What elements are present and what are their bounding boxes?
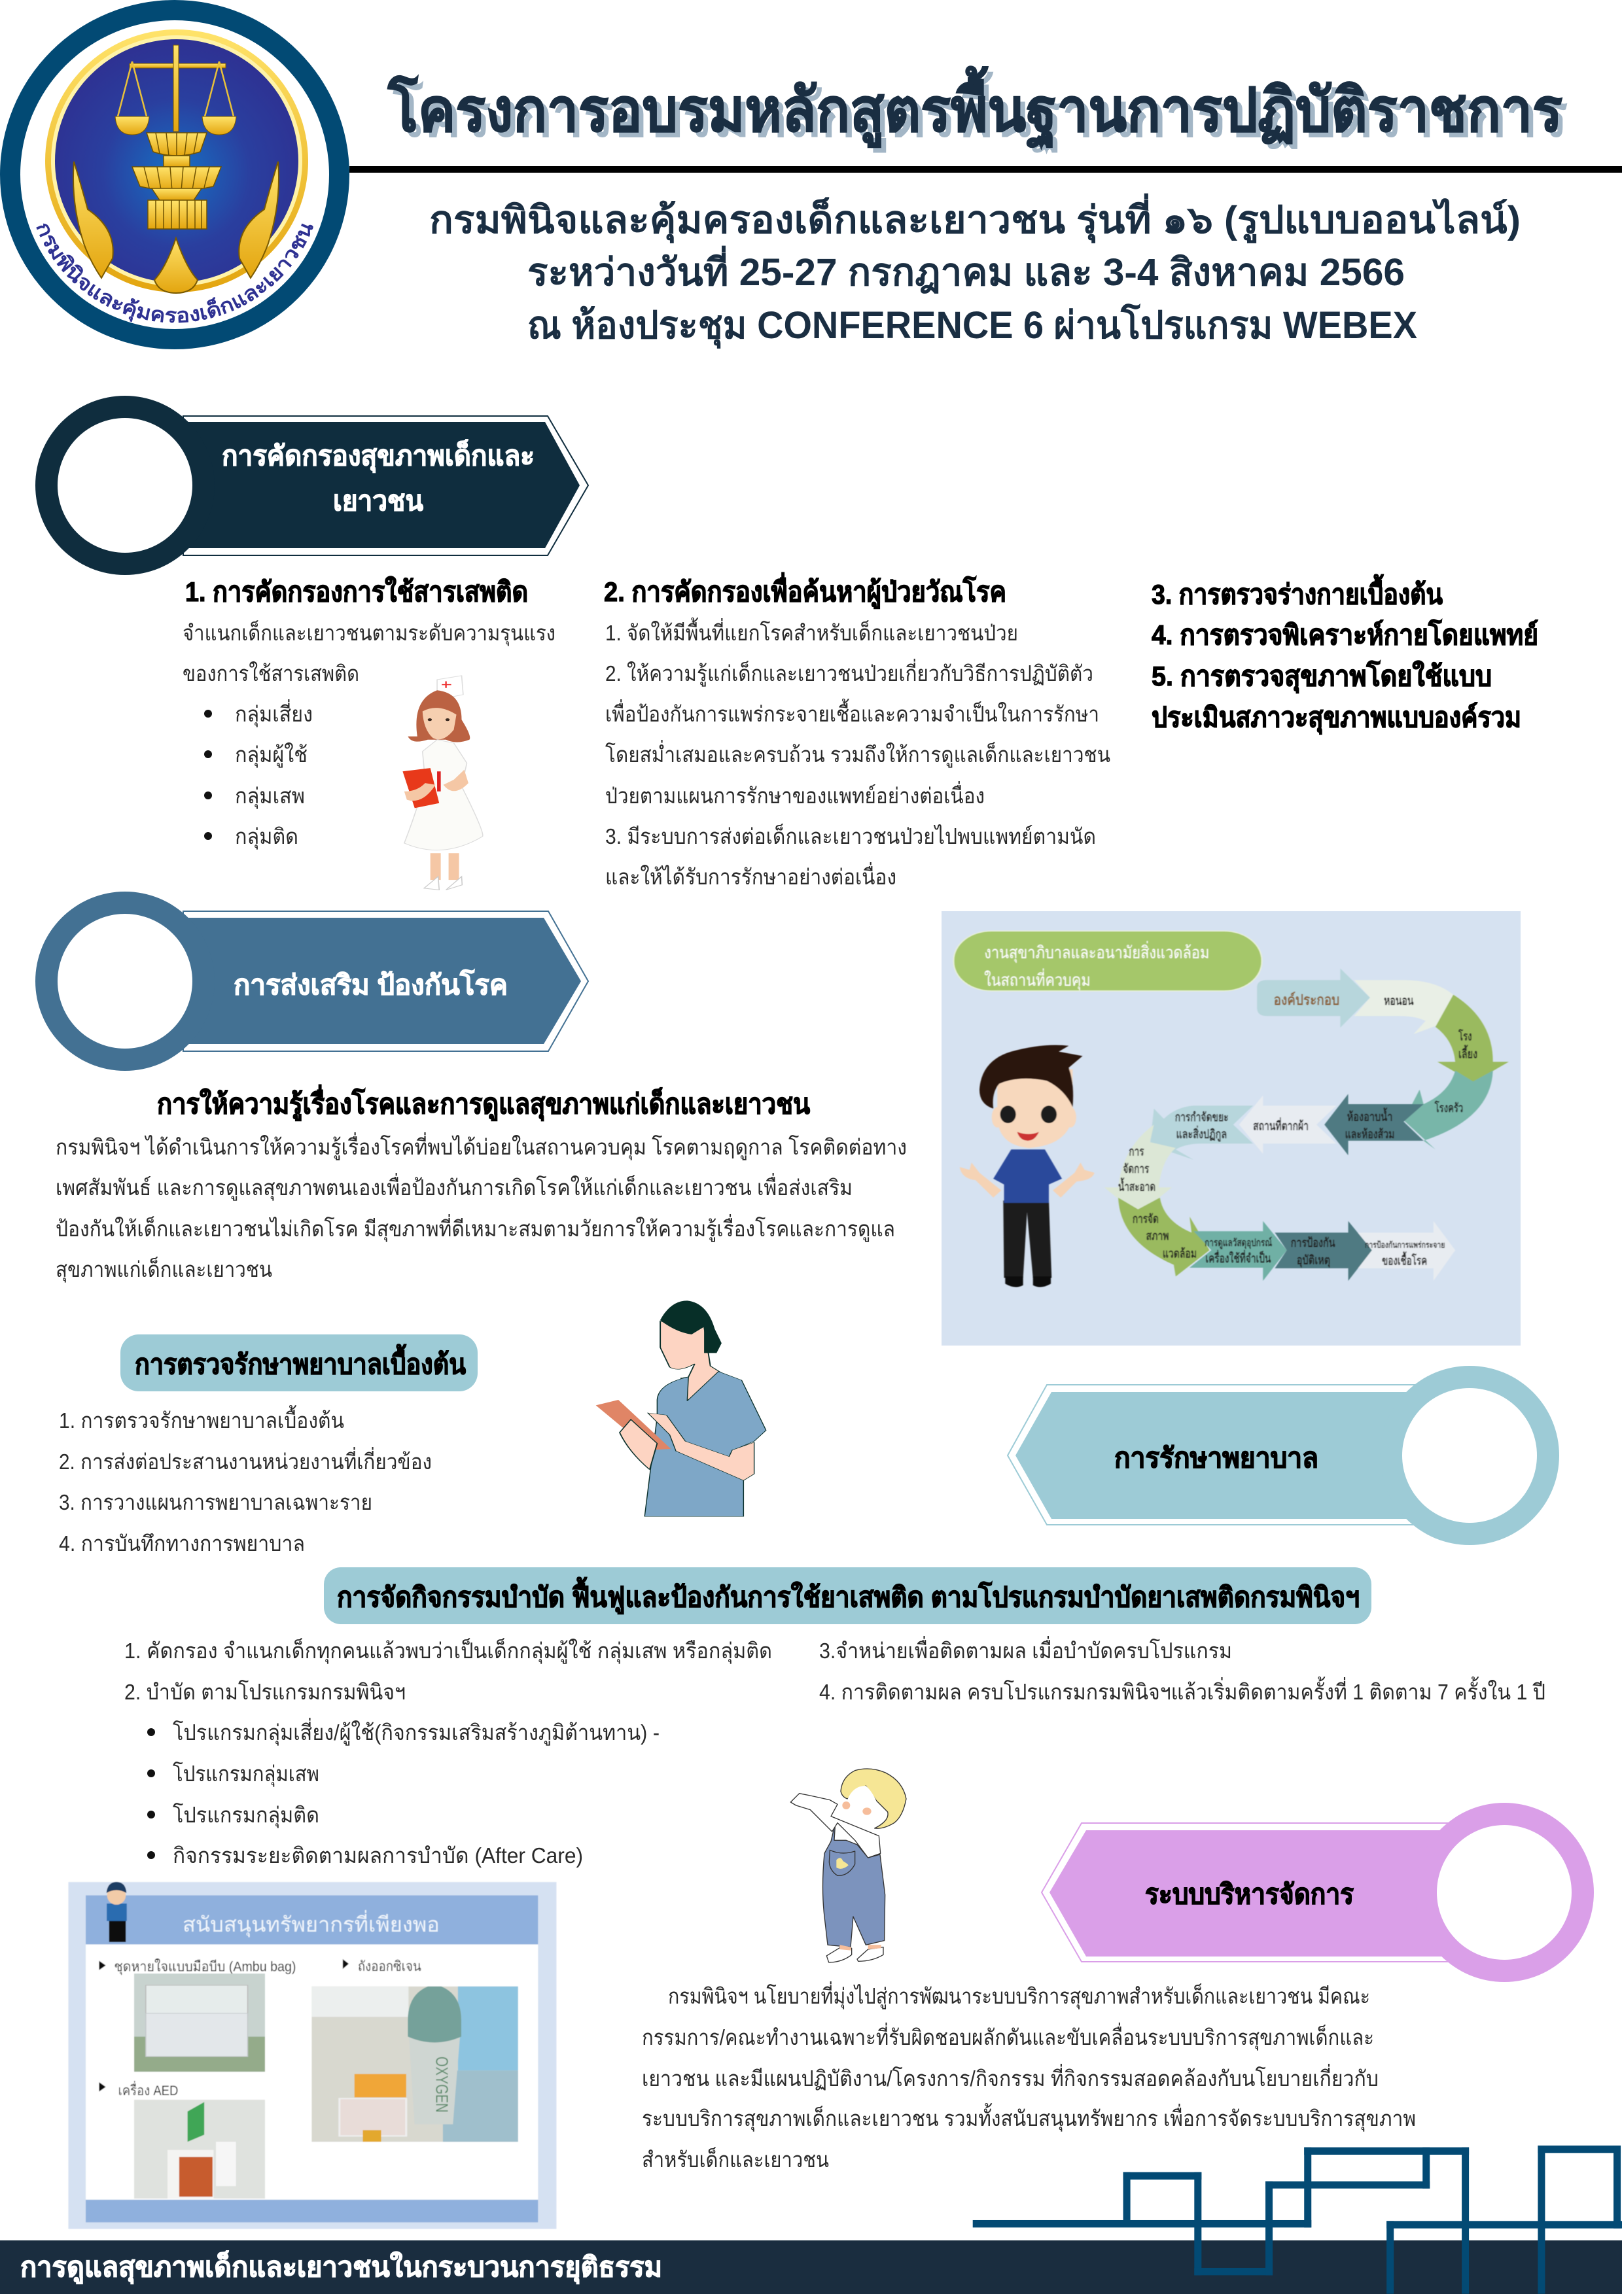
pill heading: primary nursing care — [120, 1334, 478, 1391]
icon: bottom flame — [154, 238, 198, 293]
arrow: components flow: เครื่องใช้ที่จำเป็น — [1205, 1249, 1271, 1265]
text block: examinations list: 3. การตรวจร่างกายเบื้องต้น — [1152, 574, 1443, 610]
arrow: components flow: องค์ประกอบ — [1274, 992, 1339, 1008]
text block: management paragraph: กรมพินิจฯ นโยบายที่มุ่งไปสู่การพัฒนาระบบบริการสุขภาพสำหรับเด็กและเยาวชน มีคณะ — [668, 1981, 1370, 2009]
banner: health promotion and disease prevention — [35, 892, 588, 1071]
text block: disease education paragraph — [56, 1132, 907, 1283]
text block: rehabilitation steps left: 2. บำบัด ตามโปรแกรมกรมพินิจฯ — [124, 1680, 406, 1704]
text block: substance screening: กลุ่มติด — [235, 824, 298, 850]
arrow: components flow: การกำจัดขยะ — [1175, 1110, 1229, 1124]
text block: TB screening: 3. มีระบบการส่งต่อเด็กและเยาวชนป่วยไปพบแพทย์ตามนัด — [605, 824, 1096, 848]
text block: substance screening: 1. การคัดกรองการใช้สารเสพติด — [185, 576, 528, 607]
text block: TB screening: ป่วยตามแผนการรักษาของแพทย์อย่างต่อเนื่อง — [605, 781, 985, 808]
arrow: components flow: โรง — [1458, 1029, 1472, 1043]
text block: primary care list — [59, 1405, 432, 1556]
footer bar with title: การดูแลสุขภาพเด็กและเยาวชนในกระบวนการยุติธรรม — [20, 2250, 662, 2284]
text block: substance screening: กลุ่มเสพ — [235, 784, 305, 809]
text block: substance screening: กลุ่มผู้ใช้ — [235, 742, 308, 768]
text block: examinations list: 4. การตรวจพิเคราะห์กายโดยแพทย์ — [1152, 619, 1538, 650]
text block: substance screening: จำแนกเด็กและเยาวชนตามระดับความรุนแรง — [183, 620, 555, 646]
arrow: components flow: สภาพ — [1146, 1229, 1169, 1243]
text block: disease education paragraph: สุขภาพแก่เด็กและเยาวชน — [56, 1257, 272, 1283]
panel: environmental sanitation diagram — [942, 911, 1521, 1346]
arrow: components flow: ห้องอาบน้ำ — [1347, 1107, 1392, 1124]
text block: rehabilitation steps left — [124, 1638, 772, 1868]
text block: management paragraph: เยาวชน และมีแผนปฏิบัติงาน/โครงการ/กิจกรรม ที่กิจกรรมสอดคล้องกับนโยบายเกี่ยวกับ — [642, 2064, 1379, 2091]
text block: TB screening: และให้ได้รับการรักษาอย่างต่อเนื่อง — [605, 862, 896, 889]
subtitle: course details: ระหว่างวันที่ 25-27 กรกฎาคม และ 3-4 สิงหาคม 2566 — [527, 245, 1405, 294]
text block: TB screening: 2. ให้ความรู้แก่เด็กและเยาวชนป่วยเกี่ยวกับวิธีการปฏิบัติตัว — [605, 659, 1093, 687]
text block: rehabilitation steps right: 3.จำหน่ายเพื่อติดตามผล เมื่อบำบัดครบโปรแกรม — [819, 1636, 1232, 1663]
text block: examinations list: 5. การตรวจสุขภาพโดยใช้แบบ — [1152, 660, 1492, 693]
text block: management paragraph — [642, 1981, 1416, 2172]
text block: primary care list: 1. การตรวจรักษาพยาบาลเบื้องต้น — [59, 1405, 344, 1433]
text block: substance screening: กลุ่มเสี่ยง — [235, 699, 313, 727]
illustration: child in overalls — [790, 1769, 906, 1962]
arrow: components flow: น้ำสะอาด — [1118, 1177, 1155, 1194]
text block: management paragraph: สำหรับเด็กและเยาวชน — [642, 2147, 829, 2172]
illustration: nurse with tablet — [596, 1300, 766, 1516]
arrow: components flow — [1104, 968, 1509, 1281]
text block: rehabilitation steps left: โปรแกรมกลุ่มเสพ — [173, 1762, 319, 1787]
arrow: components flow: เลี้ยง — [1458, 1045, 1477, 1061]
arrow: components flow: และห้องส้วม — [1345, 1127, 1394, 1141]
photo: oxygen tank: ถังออกซิเจน — [358, 1958, 421, 1974]
icon: lotus pedestal — [132, 133, 221, 229]
seal curved caption — [33, 216, 317, 322]
icon: scales of justice — [115, 45, 236, 135]
photo: AED cabinet: เครื่อง AED — [118, 2081, 178, 2098]
text block: TB screening — [604, 572, 1110, 889]
banner: health promotion and disease prevention: การส่งเสริม ป้องกันโรค — [234, 969, 508, 1000]
banner: medical care — [1008, 1366, 1559, 1545]
text block: TB screening: 1. จัดให้มีพื้นที่แยกโรคสำหรับเด็กและเยาวชนป่วย — [605, 617, 1018, 645]
banner: management system: ระบบบริหารจัดการ — [1145, 1879, 1354, 1909]
text block: substance screening — [183, 576, 555, 850]
arrow: components flow: การ — [1129, 1145, 1144, 1158]
text block: primary care list: 3. การวางแผนการพยาบาลเฉพาะราย — [59, 1490, 372, 1514]
footer bar with title — [0, 2240, 1622, 2294]
logo: department seal: กรมพินิจและคุ้มครองเด็กและเยาวชน — [36, 224, 313, 323]
subtitle: course details: ณ ห้องประชุม CONFERENCE 6 ผ่านโปรแกรม WEBEX — [527, 302, 1417, 349]
banner: health screening: การคัดกรองสุขภาพเด็กและ — [222, 439, 535, 473]
text block: disease education paragraph: เพศสัมพันธ์ และการดูแลสุขภาพตนเองเพื่อป้องกันการเกิดโรคให้แก่เด็กและเยาวชน เพื่อส่งเสริม — [56, 1173, 853, 1201]
arrow: components flow: ของเชื้อโรค — [1382, 1251, 1427, 1268]
text block: TB screening: 2. การคัดกรองเพื่อค้นหาผู้ป่วยวัณโรค — [604, 572, 1006, 609]
decorative city-line graphic — [973, 2146, 1622, 2294]
text block: management paragraph: กรรมการ/คณะทำงานเฉพาะที่รับผิดชอบผลักดันและขับเคลื่อนระบบบริการสุขภาพเด็กและ — [642, 2023, 1374, 2051]
callout: sanitation heading pill: งานสุขาภิบาลและอนามัยสิ่งแวดล้อม — [984, 941, 1209, 963]
photo: ambu bag kit — [99, 1958, 296, 2072]
arrow: components flow: สถานที่ตากผ้า — [1253, 1117, 1309, 1132]
icon: left naga — [73, 162, 113, 278]
slide title: สนับสนุนทรัพยากรที่เพียงพอ — [183, 1910, 440, 1938]
text block: disease education paragraph: กรมพินิจฯ ได้ดำเนินการให้ความรู้เรื่องโรคที่พบได้บ่อยในสถานควบคุม โรคตามฤดูกาล โรคติดต่อทาง — [56, 1132, 907, 1160]
text block: rehabilitation steps right: 4. การติดตามผล ครบโปรแกรมกรมพินิจฯแล้วเริ่มติดตามครั้งที่ 1 ติดตาม 7 ครั้งใน 1 ปี — [819, 1677, 1545, 1704]
text block: TB screening: โดยสม่ำเสมอและครบถ้วน รวมถึงให้การดูแลเด็กและเยาวชน — [605, 740, 1110, 768]
subtitle: course details: กรมพินิจและคุ้มครองเด็กและเยาวชน รุ่นที่ ๑๖ (รูปแบบออนไลน์) — [429, 193, 1521, 244]
pill heading: rehabilitation activities — [324, 1567, 1371, 1624]
text block: rehabilitation steps right — [819, 1636, 1545, 1704]
banner: health screening — [35, 396, 588, 575]
text block: examinations list — [1152, 574, 1538, 735]
text block: substance screening: ของการใช้สารเสพติด — [183, 661, 359, 686]
arrow: components flow: การป้องกัน — [1291, 1236, 1335, 1249]
illustration: cartoon officer — [960, 1045, 1095, 1287]
photo: oxygen tank: OXYGEN — [432, 2057, 451, 2113]
icon: right naga — [239, 162, 279, 278]
banner: health screening: เยาวชน — [333, 485, 423, 516]
illustration: nurse with clipboard — [402, 676, 483, 890]
panel: adequate resources slide — [68, 1882, 556, 2229]
arrow: components flow: จัดการ — [1123, 1162, 1149, 1175]
photo: ambu bag kit: ชุดหายใจแบบมือบีบ (Ambu bag) — [114, 1958, 296, 1975]
banner: management system — [1042, 1803, 1594, 1982]
text block: primary care list: 4. การบันทึกทางการพยาบาล — [59, 1531, 305, 1556]
logo: department seal — [0, 0, 349, 349]
photo: oxygen tank — [311, 1958, 518, 2142]
text block: rehabilitation steps left: กิจกรรมระยะติดตามผลการบำบัด (After Care) — [173, 1843, 583, 1868]
text block: primary care list: 2. การส่งต่อประสานงานหน่วยงานที่เกี่ยวข้อง — [59, 1447, 432, 1474]
icon: small officer — [107, 1882, 127, 1942]
arrow: components flow: โรงครัว — [1434, 1100, 1463, 1115]
arrow: components flow: การดูแลวัสดุอุปกรณ์ — [1205, 1236, 1272, 1249]
text block: rehabilitation steps left: โปรแกรมกลุ่มเสี่ยง/ผู้ใช้(กิจกรรมเสริมสร้างภูมิต้านทาน) - — [173, 1718, 660, 1746]
arrow: components flow: การจัด — [1133, 1212, 1159, 1226]
photo: AED cabinet — [99, 2081, 265, 2199]
banner: medical care: การรักษาพยาบาล — [1114, 1442, 1318, 1473]
text block: TB screening: เพื่อป้องกันการแพร่กระจายเชื้อและความจำเป็นในการรักษา — [605, 699, 1099, 726]
arrow: components flow: การป้องกันการแพร่กระจาย — [1365, 1240, 1445, 1250]
arrow: components flow: อุบัติเหตุ — [1297, 1253, 1330, 1268]
arrow: components flow: และสิ่งปฏิกูล — [1176, 1125, 1227, 1142]
subtitle: course details — [429, 193, 1521, 349]
text block: rehabilitation steps left: โปรแกรมกลุ่มติด — [173, 1803, 319, 1828]
arrow: components flow: แวดล้อม — [1163, 1247, 1197, 1261]
pill heading: rehabilitation activities: การจัดกิจกรรมบำบัด ฟื้นฟูและป้องกันการใช้ยาเสพติด ตามโปรแกรมบำบัดยาเสพติดกรมพินิจฯ — [337, 1576, 1360, 1614]
text block: examinations list: ประเมินสภาวะสุขภาพแบบองค์รวม — [1152, 702, 1521, 735]
text block: management paragraph: ระบบบริการสุขภาพเด็กและเยาวชน รวมทั้งสนับสนุนทรัพยากร เพื่อการจัดระบบบริการสุขภาพ — [642, 2103, 1416, 2132]
text block: rehabilitation steps left: 1. คัดกรอง จำแนกเด็กทุกคนแล้วพบว่าเป็นเด็กกลุ่มผู้ใช้ กลุ่มเสพ หรือกลุ่มติด — [124, 1638, 772, 1664]
arrow: components flow: หอนอน — [1384, 994, 1414, 1007]
callout: sanitation heading pill — [954, 931, 1261, 991]
title with shadow: โครงการอบรมหลักสูตรพื้นฐานการปฏิบัติราชการ — [393, 71, 1568, 155]
heading: disease education: การให้ความรู้เรื่องโรคและการดูแลสุขภาพแก่เด็กและเยาวชน — [157, 1085, 810, 1121]
title with shadow: โครงการอบรมหลักสูตรพื้นฐานการปฏิบัติราชการ — [387, 66, 1562, 150]
header rule — [349, 166, 1622, 173]
pill heading: primary nursing care: การตรวจรักษาพยาบาลเบื้องต้น — [135, 1344, 466, 1380]
text block: disease education paragraph: ป้องกันให้เด็กและเยาวชนไม่เกิดโรค มีสุขภาพที่ดีเหมาะสมตามวัยการให้ความรู้เรื่องโรคและการดูแล — [56, 1214, 895, 1242]
callout: sanitation heading pill: ในสถานที่ควบคุม — [984, 968, 1091, 991]
